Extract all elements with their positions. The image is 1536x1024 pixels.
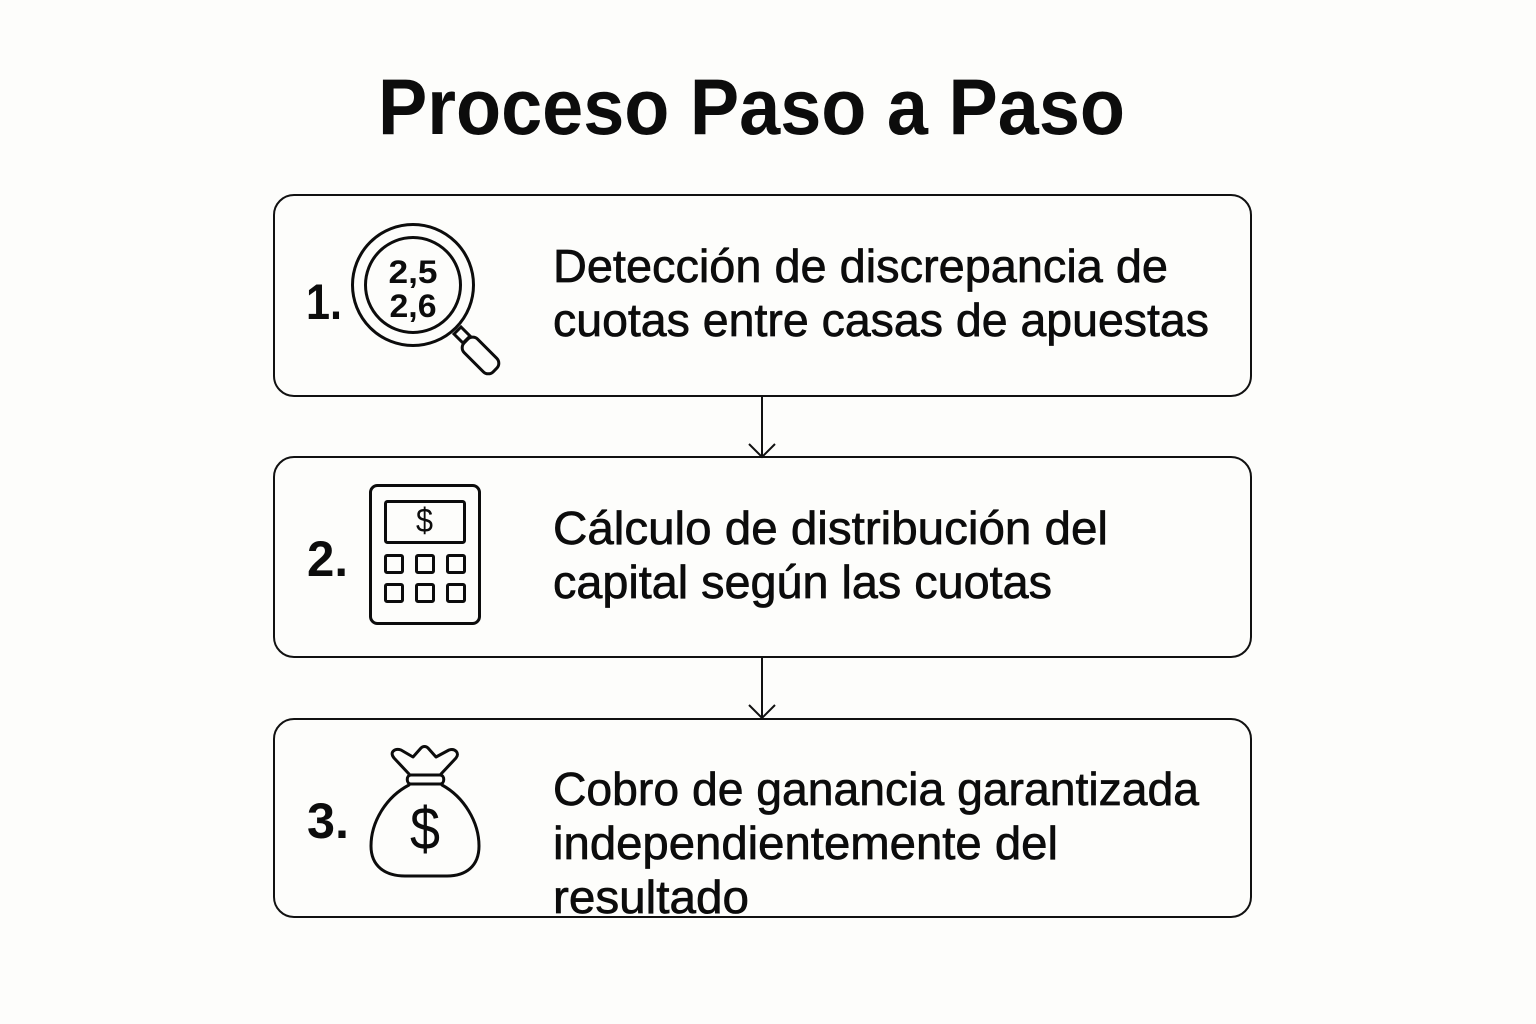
icon: magnifying glass with odds: 2,5 (388, 254, 438, 290)
step number 3: 3. (307, 793, 349, 849)
step 3 description: resultado (553, 871, 749, 923)
arrow: step 2 to step 3 (749, 657, 775, 718)
icon: money bag: $ (410, 795, 440, 862)
step 2 description: Cálculo de distribución del (553, 502, 1108, 554)
step 1 description: cuotas entre casas de apuestas (553, 294, 1209, 346)
panel: step 1 (274, 195, 1251, 396)
icon: money bag (371, 746, 479, 876)
step 1 description (553, 240, 1209, 346)
step 2 description: capital según las cuotas (553, 556, 1052, 608)
step 2 description (553, 502, 1108, 608)
step 3 description (553, 763, 1199, 923)
title: Proceso Paso a Paso (378, 62, 1125, 151)
step number 2: 2. (307, 531, 348, 587)
panel: step 2 (274, 457, 1251, 657)
icon: magnifying glass with odds (352, 224, 502, 377)
step 1 description: Detección de discrepancia de (553, 240, 1168, 292)
step 3 description: independientemente del (553, 817, 1058, 869)
step 3 description: Cobro de ganancia garantizada (553, 763, 1199, 815)
icon: calculator (370, 486, 480, 624)
arrow: step 1 to step 2 (749, 396, 775, 457)
step number 1: 1. (306, 274, 342, 330)
icon: calculator: $ (416, 502, 433, 540)
icon: magnifying glass with odds: 2,6 (390, 288, 436, 324)
panel: step 3 (274, 719, 1251, 923)
